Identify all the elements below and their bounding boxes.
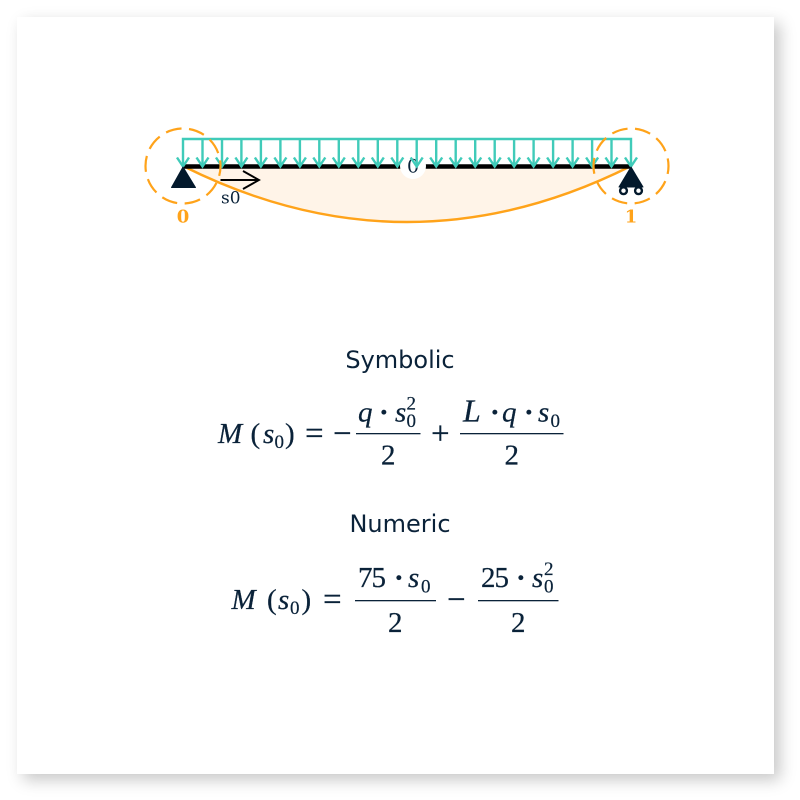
node label 1: 1 <box>625 206 637 228</box>
numeric equation: 2 <box>388 607 402 639</box>
node 0 dashed marker <box>146 128 220 204</box>
heading: Symbolic: Symbolic <box>345 346 455 374</box>
numeric equation: · <box>394 562 404 594</box>
numeric equation: ) <box>302 584 311 616</box>
symbolic equation: s <box>538 396 549 428</box>
element label: 0 <box>400 153 426 179</box>
roller support <box>619 167 643 194</box>
numeric equation: 0 <box>290 598 300 619</box>
axis label s0: s0 <box>221 188 241 208</box>
numeric equation: s <box>532 562 543 594</box>
distributed load <box>177 139 637 166</box>
symbolic equation: 0 <box>550 411 560 432</box>
element label: 0: 0 <box>407 156 419 178</box>
symbolic equation: 0 <box>274 432 284 453</box>
numeric equation: 5 <box>494 562 509 594</box>
symbolic equation: ) <box>285 418 295 450</box>
numeric equation: 2 <box>511 607 526 639</box>
symbolic equation: q <box>502 396 516 428</box>
numeric equation: s <box>408 562 419 594</box>
numeric equation: s <box>278 584 289 616</box>
numeric equation: 7 <box>358 562 372 594</box>
numeric equation <box>230 559 558 639</box>
symbolic equation: ( <box>250 418 260 450</box>
numeric equation: M <box>230 584 258 616</box>
symbolic equation: · <box>524 396 534 428</box>
symbolic equation: 0 <box>406 411 416 432</box>
symbolic equation: · <box>490 396 500 428</box>
symbolic equation: − <box>333 416 352 452</box>
numeric equation: 5 <box>372 562 386 594</box>
numeric equation: 2 <box>481 562 496 594</box>
heading: Numeric: Numeric <box>349 510 451 538</box>
numeric equation: 0 <box>421 576 430 598</box>
symbolic equation <box>217 392 564 472</box>
numeric equation: · <box>516 562 526 594</box>
symbolic equation: = <box>305 416 324 452</box>
node label 0: 0 <box>177 206 189 228</box>
pinned support <box>172 167 196 188</box>
symbolic equation: + <box>431 416 450 452</box>
bending moment diagram <box>183 166 631 222</box>
symbolic equation: L <box>462 392 481 428</box>
symbolic equation: 2 <box>406 394 416 414</box>
symbolic equation: · <box>379 396 389 428</box>
numeric equation: 0 <box>544 576 554 598</box>
node 1 dashed marker <box>594 128 668 204</box>
numeric equation: − <box>447 582 466 618</box>
numeric equation: 2 <box>544 559 554 580</box>
symbolic equation: 2 <box>504 440 519 472</box>
symbolic equation: M <box>217 418 244 450</box>
symbolic equation: s <box>263 418 274 450</box>
beam <box>183 164 631 169</box>
symbolic equation: s <box>395 396 406 428</box>
numeric equation: = <box>323 582 342 618</box>
symbolic equation: q <box>358 396 372 428</box>
symbolic equation: 2 <box>381 440 396 472</box>
numeric equation: ( <box>267 584 277 616</box>
arrow: s0 axis <box>220 171 259 189</box>
